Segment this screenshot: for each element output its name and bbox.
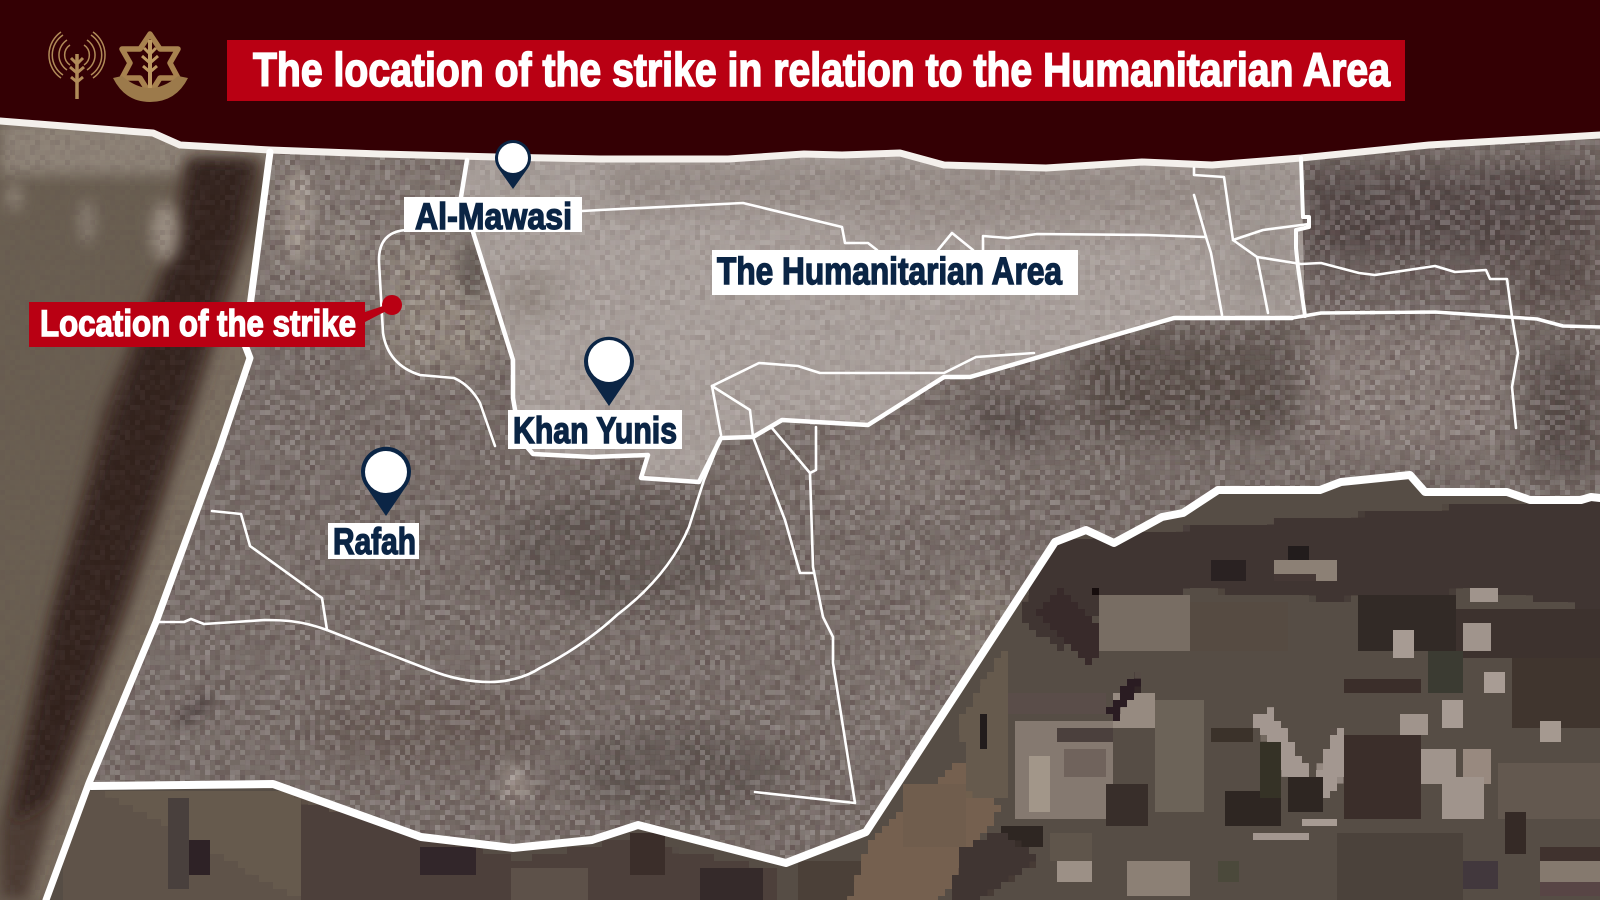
west strip light margin (29, 250, 254, 900)
icon: signal unit emblem (49, 32, 105, 99)
map region: light mosaic noise (94, 139, 1600, 859)
map region: west strip and dark band (0, 124, 274, 900)
header band (0, 0, 1600, 166)
west strip sand spots (7, 183, 179, 262)
label: Rafah: Rafah (333, 521, 416, 562)
western border line (46, 152, 270, 900)
icon: army emblem star, sword and olive (113, 34, 188, 102)
middle fields (1009, 693, 1106, 713)
humanitarian mosaic noise (464, 157, 1304, 480)
southern and eastern border line (91, 475, 1600, 863)
south-west farmland (60, 790, 360, 900)
pin: Al-Mawasi (495, 140, 531, 189)
pin: Khan Yunis (584, 337, 634, 406)
dark northern fields (1020, 495, 1600, 650)
map region: central Gaza tonal blobs (250, 150, 1600, 815)
dark band core (14, 160, 252, 820)
satellite map background (94, 139, 1600, 859)
callout: Location of the strike: Location of the strike (40, 303, 356, 344)
map region: The Humanitarian Area highlight (463, 156, 1304, 480)
west strip mosaic noise (5, 125, 266, 795)
dark band outer (0, 158, 265, 900)
label: Al-Mawasi: Al-Mawasi (415, 196, 572, 237)
thin inner lines (156, 168, 1518, 803)
map region: dark mosaic noise (96, 139, 1600, 855)
lower fields (903, 784, 931, 805)
humanitarian area boundary (461, 160, 467, 197)
label: Khan Yunis: Khan Yunis (513, 410, 677, 451)
label: The Humanitarian Area: The Humanitarian Area (717, 251, 1063, 293)
coast line (0, 121, 1600, 168)
map region: tan patches (173, 169, 529, 805)
pin: Rafah (361, 447, 411, 516)
map region: south fields (0, 470, 1600, 900)
title: The location of the strike in relation to the Humanitarian Area (253, 43, 1391, 96)
humanitarian light noise (470, 157, 1304, 478)
